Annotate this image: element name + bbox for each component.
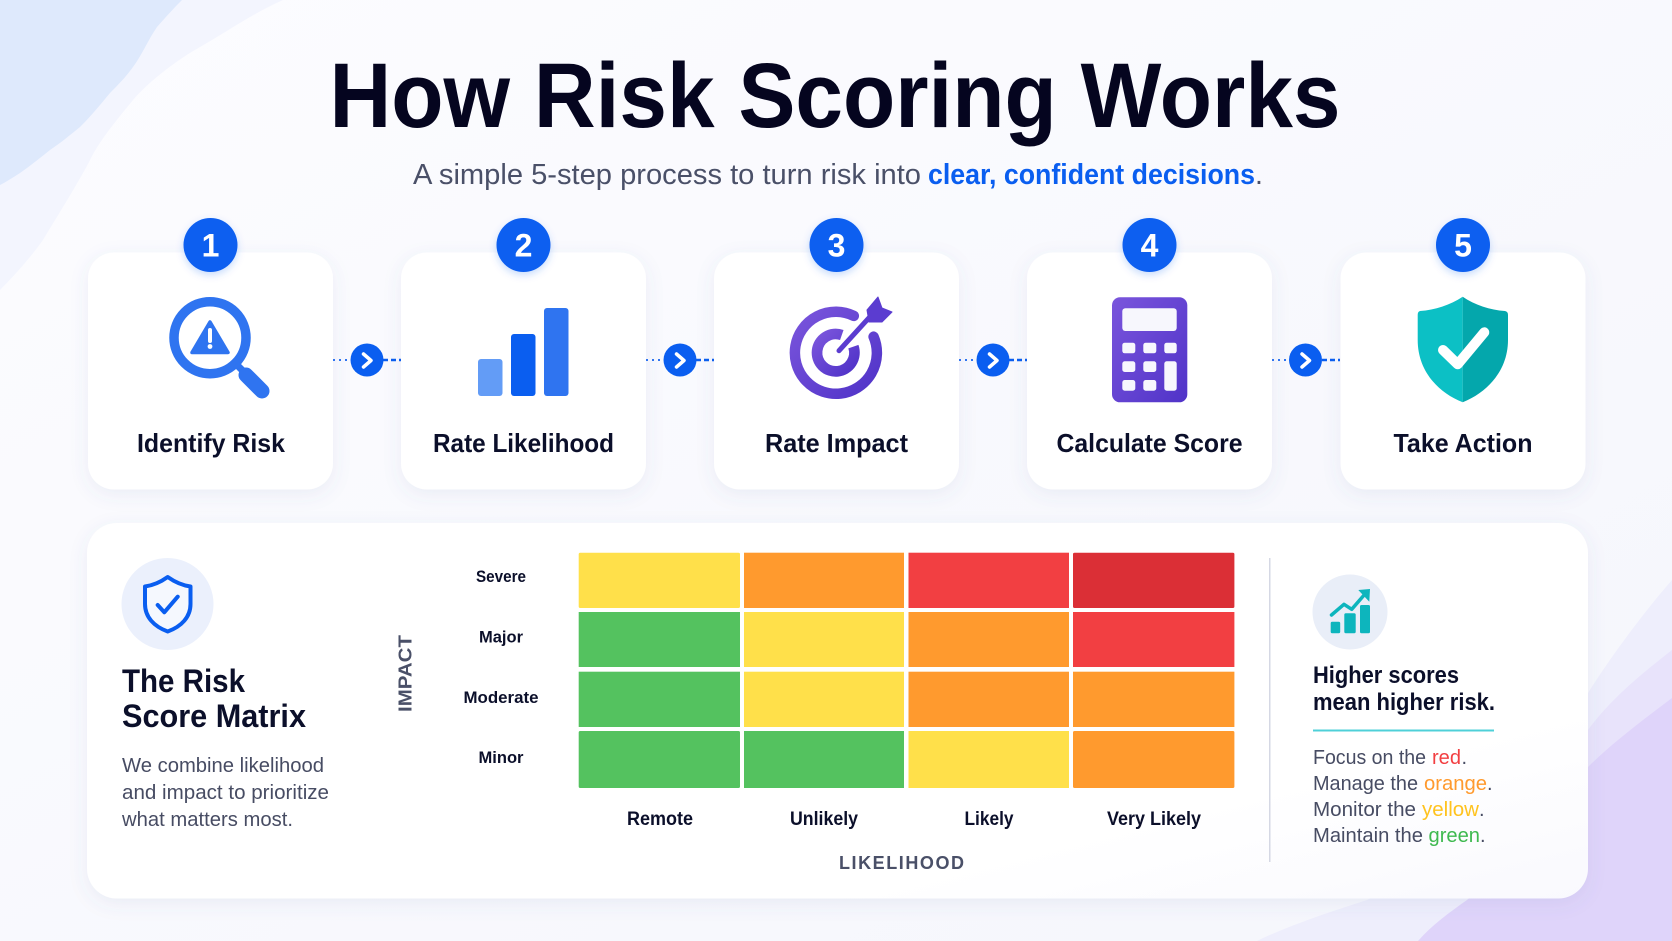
icon: target with arrow — [795, 297, 892, 394]
icon: magnifier with warning — [174, 302, 262, 391]
step number 1 — [184, 218, 238, 272]
step number 4: 4 — [1141, 228, 1159, 264]
callout list: Maintain the — [1313, 825, 1423, 847]
panel: step 5 take action — [1340, 218, 1586, 490]
description: what matters most. — [121, 808, 293, 831]
step number 1: 1 — [202, 228, 219, 264]
panel: step 3 rate impact — [714, 218, 959, 490]
subtitle: clear, confident decisions — [928, 159, 1255, 191]
subtitle: . — [1255, 159, 1263, 191]
panel: step 2 rate likelihood — [401, 218, 646, 490]
arrow: step 4 to 5 — [1272, 344, 1340, 376]
title: How Risk Scoring Works — [330, 45, 1340, 147]
row labels: Moderate — [464, 688, 538, 707]
subtitle: A simple 5-step process to turn risk into — [413, 159, 921, 191]
heat map matrix — [579, 553, 1234, 788]
callout list: green — [1428, 825, 1480, 847]
row labels: Major — [479, 628, 523, 646]
icon: rising chart in circle — [1312, 574, 1388, 650]
icon: calculator — [1112, 297, 1187, 402]
arrow: step 2 to 3 — [646, 344, 714, 376]
label: Calculate Score — [1056, 428, 1242, 458]
step number 5: 5 — [1454, 228, 1472, 264]
row labels: Severe — [476, 567, 526, 586]
heading: Score Matrix — [122, 698, 306, 734]
label: Take Action — [1394, 428, 1532, 458]
column labels: Unlikely — [790, 809, 858, 830]
icon: rising bars — [478, 308, 568, 396]
description — [121, 754, 329, 831]
step number 2: 2 — [515, 228, 532, 264]
step number 3 — [810, 218, 864, 272]
heading: The Risk — [122, 663, 245, 699]
row labels: Minor — [478, 748, 524, 767]
callout list: . — [1480, 825, 1486, 847]
step number 5 — [1436, 218, 1490, 272]
callout list: . — [1462, 747, 1467, 769]
callout list: orange — [1424, 773, 1487, 795]
panel: risk score matrix — [87, 523, 1588, 898]
description: and impact to prioritize — [122, 781, 329, 804]
callout heading — [1313, 662, 1495, 716]
heading — [122, 663, 306, 734]
callout list: red — [1432, 747, 1461, 769]
callout list: yellow — [1422, 799, 1480, 821]
callout list: Focus on the — [1313, 747, 1426, 769]
callout heading: Higher scores — [1313, 662, 1459, 689]
callout list: . — [1487, 773, 1493, 795]
column labels: Remote — [627, 809, 693, 830]
column labels: Likely — [964, 809, 1014, 830]
callout list: Monitor the — [1313, 799, 1416, 821]
axis label: impact: IMPACT — [394, 634, 416, 712]
step number 3: 3 — [828, 228, 845, 264]
step number 4 — [1122, 218, 1176, 272]
column labels — [627, 809, 1201, 830]
column labels: Very Likely — [1107, 809, 1201, 830]
panel: step 1 identify risk — [88, 218, 333, 490]
callout heading: mean higher risk. — [1313, 689, 1495, 716]
axis label: likelihood: LIKELIHOOD — [839, 853, 964, 873]
panel: step 4 calculate score — [1027, 218, 1272, 490]
label: Rate Likelihood — [433, 428, 614, 458]
callout list — [1313, 747, 1493, 847]
callout list: . — [1479, 799, 1485, 821]
icon: shield in circle — [122, 558, 214, 650]
callout list: Manage the — [1313, 773, 1418, 795]
description: We combine likelihood — [122, 754, 324, 777]
step number 2 — [496, 218, 550, 272]
arrow: step 1 to 2 — [333, 344, 401, 376]
label: Rate Impact — [765, 428, 908, 458]
arrow: step 3 to 4 — [959, 344, 1027, 376]
label: Identify Risk — [137, 428, 286, 458]
row labels — [464, 567, 538, 767]
icon: teal shield with check — [1418, 297, 1508, 402]
